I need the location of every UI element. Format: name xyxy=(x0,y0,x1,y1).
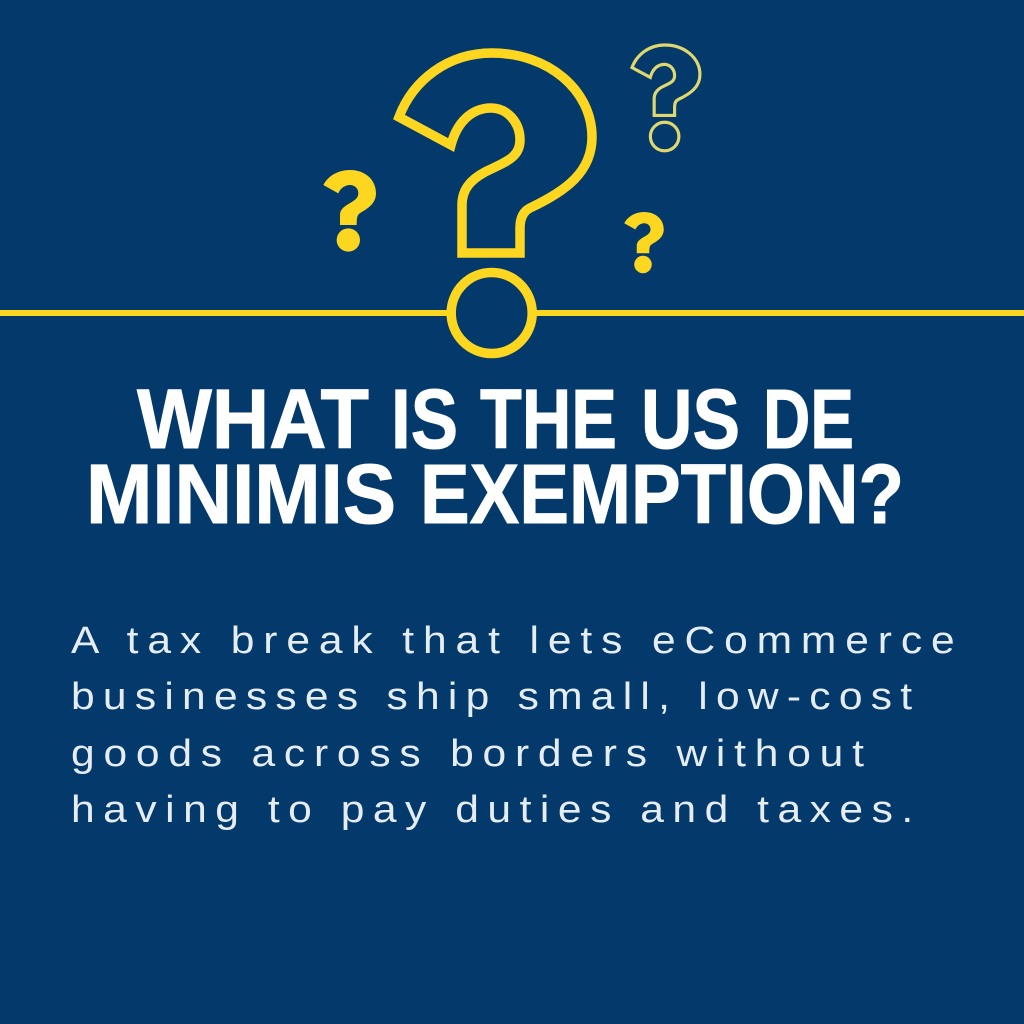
divider line right xyxy=(535,310,1024,316)
body text: businesses ship small, low-cost xyxy=(71,674,912,717)
icon: filled question mark right xyxy=(624,212,664,273)
title: MINIMIS xyxy=(86,447,396,541)
body text: having to pay duties and taxes. xyxy=(71,787,913,830)
body text xyxy=(71,618,955,830)
icon: small outlined question mark top right xyxy=(632,45,700,151)
icon: large outlined question mark xyxy=(399,53,592,354)
title: EXEMPTION? xyxy=(420,447,904,541)
icon: filled question mark left xyxy=(323,170,376,252)
title: IS xyxy=(391,372,458,466)
title: DE xyxy=(763,372,854,466)
title xyxy=(86,372,904,541)
title: THE xyxy=(480,372,617,466)
title: WHAT xyxy=(137,372,369,466)
body text: goods across borders without xyxy=(71,731,864,774)
divider line left xyxy=(0,310,448,316)
title: US xyxy=(641,372,740,466)
body text: A tax break that lets eCommerce xyxy=(71,618,955,661)
